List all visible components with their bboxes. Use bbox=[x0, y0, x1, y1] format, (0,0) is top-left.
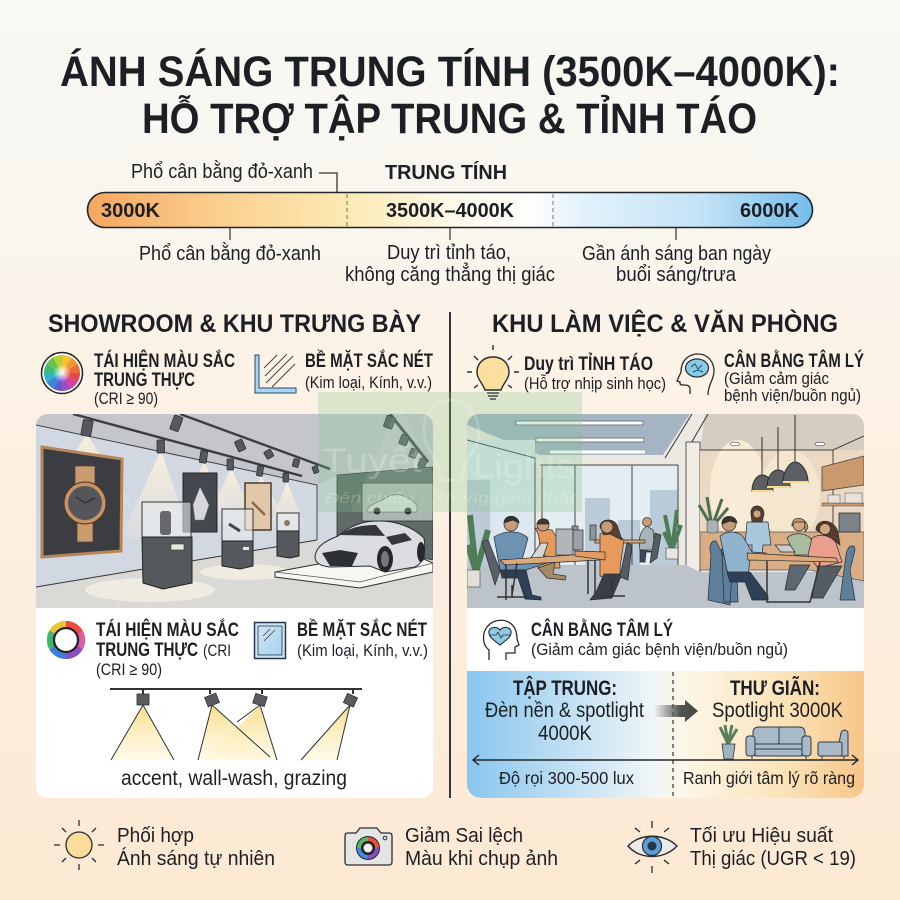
text: alertness bbox=[524, 353, 666, 393]
colour temperature scale: buổi sáng/trưa bbox=[616, 264, 737, 286]
text: natural light: Ánh sáng tự nhiên bbox=[117, 847, 275, 870]
text: psychological balance: CÂN BẰNG TÂM LÝ bbox=[724, 350, 864, 372]
lighting techniques diagram bbox=[110, 688, 362, 790]
watermark bbox=[318, 392, 582, 512]
text: balance bbox=[531, 619, 788, 659]
text: alertness: (Hỗ trợ nhịp sinh học) bbox=[524, 374, 666, 393]
display cases bbox=[142, 502, 191, 537]
title bbox=[60, 48, 840, 143]
focus text: Đèn nền & spotlight bbox=[485, 699, 644, 722]
text: psychological balance: (Giảm cảm giác bbox=[724, 369, 829, 388]
title: ÁNH SÁNG TRUNG TÍNH (3500K–4000K): bbox=[60, 48, 840, 96]
text: visual performance bbox=[690, 824, 856, 870]
text: colour in photos bbox=[405, 824, 558, 870]
relax text: THƯ GIÃN: bbox=[730, 675, 820, 700]
focus text bbox=[485, 675, 644, 745]
text: surface: (Kim loại, Kính, v.v.) bbox=[297, 641, 428, 660]
colour temperature scale: Duy trì tỉnh táo, bbox=[387, 242, 511, 264]
icon: colour wheel bbox=[42, 352, 82, 394]
icon: CRI ring bbox=[47, 621, 85, 659]
text: psychological balance bbox=[724, 350, 864, 405]
column divider bbox=[449, 312, 451, 798]
colour temperature scale: 6000K bbox=[740, 200, 800, 222]
scale captions: Phổ cân bằng đỏ-xanh bbox=[139, 242, 321, 265]
heading: office: KHU LÀM VIỆC & VĂN PHÒNG bbox=[492, 308, 838, 338]
cabinets and shelf bbox=[822, 456, 864, 491]
pendant lamps bbox=[752, 415, 808, 491]
title: HỖ TRỢ TẬP TRUNG & TỈNH TÁO bbox=[142, 94, 757, 143]
watermark: Tuyết bbox=[322, 442, 423, 480]
text: alertness: Duy trì TỈNH TÁO bbox=[524, 353, 653, 375]
floor bbox=[36, 540, 433, 608]
colour temperature scale: không căng thẳng thị giác bbox=[345, 262, 555, 286]
text: sharp surface: BỀ MẶT SẮC NÉT bbox=[305, 350, 433, 372]
framed watch bbox=[42, 447, 122, 557]
text: colour rendering bbox=[94, 350, 235, 408]
axis bbox=[473, 755, 858, 765]
desk team bbox=[482, 516, 661, 600]
text: surface: BỀ MẶT SẮC NÉT bbox=[297, 619, 427, 641]
platform bbox=[274, 558, 433, 588]
pillar and warm wall bbox=[686, 442, 700, 572]
light cones bbox=[76, 436, 126, 496]
text: sharp surface bbox=[305, 350, 433, 392]
relax text bbox=[712, 675, 843, 722]
icon: eye bbox=[628, 821, 677, 873]
icon: armchair bbox=[818, 730, 848, 759]
plants bbox=[699, 497, 728, 527]
meeting team bbox=[708, 506, 855, 605]
text: colour in photos: Giảm Sai lệch bbox=[405, 824, 523, 847]
wall art bbox=[183, 473, 217, 532]
panel: office bbox=[467, 414, 864, 798]
zone captions: Độ rọi 300-500 lux bbox=[499, 768, 634, 788]
focus text: TẬP TRUNG: bbox=[513, 675, 617, 700]
text: CRI: TÁI HIỆN MÀU SẮC bbox=[96, 619, 239, 641]
text: CRI: TRUNG THỰC bbox=[96, 640, 198, 661]
icon: sofa bbox=[746, 727, 811, 759]
watermark: Đèn chiếu - Không gian chất bbox=[325, 490, 576, 507]
text: colour in photos: Màu khi chụp ảnh bbox=[405, 847, 558, 870]
watermark: Lights bbox=[473, 448, 575, 486]
floor bbox=[467, 565, 864, 608]
text: surface bbox=[297, 619, 428, 660]
text: sharp surface: (Kim loại, Kính, v.v.) bbox=[305, 373, 432, 392]
icon: light bulb bbox=[467, 345, 519, 399]
icon: head with brain bbox=[677, 354, 714, 395]
text: natural light: Phối hợp bbox=[117, 824, 194, 847]
text: visual performance: Thị giác (UGR < 19) bbox=[690, 847, 856, 870]
icon: sharp surface bbox=[255, 354, 296, 393]
arrow bbox=[654, 700, 698, 722]
text: CRI: (CRI ≥ 90) bbox=[96, 660, 162, 679]
colour temperature scale bbox=[88, 160, 812, 286]
panel: focus to relax zones: Ranh giới tâm lý rõ ràng bbox=[683, 768, 855, 788]
focus text: 4000K bbox=[538, 722, 592, 745]
caption: accent, wall-wash, grazing bbox=[121, 767, 347, 790]
spotlights bbox=[81, 415, 427, 482]
icon: plant bbox=[720, 725, 737, 759]
text: colour rendering: TÁI HIỆN MÀU SẮC bbox=[94, 350, 235, 372]
text: natural light bbox=[117, 824, 275, 870]
icon: mirror bbox=[254, 622, 286, 658]
colour temperature scale: 3500K–4000K bbox=[386, 200, 515, 222]
windows bbox=[467, 440, 535, 565]
text: visual performance: Tối ưu Hiệu suất bbox=[690, 824, 833, 847]
label above scale: Phổ cân bằng đỏ-xanh bbox=[131, 160, 313, 183]
gradient bar bbox=[88, 192, 812, 228]
ceiling bbox=[467, 414, 690, 455]
illustration: showroom bbox=[36, 414, 433, 608]
icon: head with heart bbox=[484, 620, 519, 660]
text: colour rendering: TRUNG THỰC bbox=[94, 370, 195, 391]
heading: showroom: SHOWROOM & KHU TRƯNG BÀY bbox=[48, 309, 421, 338]
icon: camera bbox=[345, 828, 392, 865]
panel: showroom bbox=[36, 414, 433, 798]
relax text: Spotlight 3000K bbox=[712, 699, 843, 722]
text: psychological balance: bệnh viện/buồn ngủ) bbox=[724, 386, 861, 405]
sports car bbox=[315, 521, 425, 572]
neutral heading: TRUNG TÍNH bbox=[385, 161, 507, 184]
panel: focus to relax zones bbox=[467, 671, 864, 798]
ceiling bbox=[36, 414, 433, 485]
colour temperature scale: Gần ánh sáng ban ngày bbox=[582, 243, 771, 265]
scale values: 3000K bbox=[101, 200, 161, 222]
text: CRI: (CRI bbox=[203, 641, 231, 660]
illustration: office bbox=[467, 414, 864, 608]
text: CRI bbox=[96, 619, 239, 679]
back wall with car bbox=[337, 467, 433, 560]
icon: sun bbox=[54, 820, 104, 870]
text: colour rendering: (CRI ≥ 90) bbox=[94, 389, 158, 408]
tracks bbox=[73, 414, 302, 476]
text: balance: (Giảm cảm giác bệnh viện/buồn ngủ) bbox=[531, 640, 788, 659]
text: balance: CÂN BẰNG TÂM LÝ bbox=[531, 619, 673, 641]
